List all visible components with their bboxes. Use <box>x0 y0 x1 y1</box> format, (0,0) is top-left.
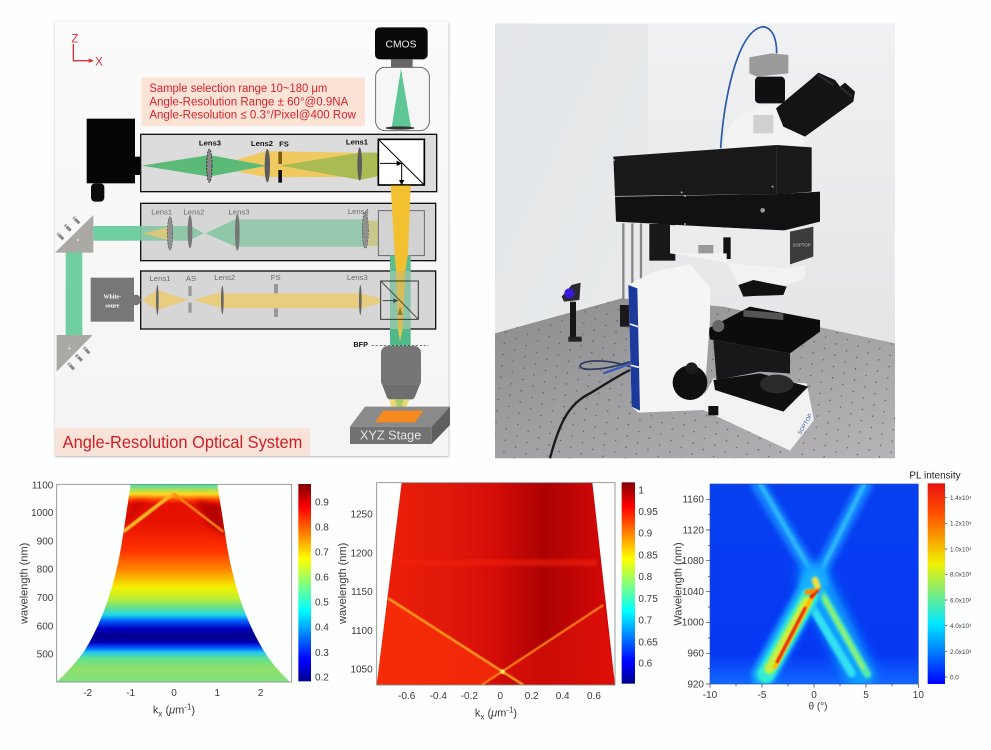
color bar title: PL intensity <box>909 471 961 482</box>
x axis title: θ (°) <box>809 701 827 712</box>
panel: microscope photograph <box>495 23 895 458</box>
x axis title: ) <box>191 704 195 716</box>
specification callout: Angle-Resolution Range ± 60°@0.9NA <box>149 94 348 108</box>
axis ticks <box>706 499 918 688</box>
cables <box>550 361 630 458</box>
y tick labels: 1100 <box>32 480 54 491</box>
y tick labels <box>350 509 373 676</box>
color bar: 1 <box>638 485 644 496</box>
color bar: 0.65 <box>638 637 658 648</box>
module: illumination laser path <box>93 203 436 261</box>
x axis title: μm <box>169 704 184 716</box>
upper black enclosure <box>613 145 812 196</box>
module: detection path: FS <box>279 140 289 149</box>
y tick labels: 600 <box>37 621 54 632</box>
black side box <box>620 305 629 327</box>
color bar: 0.7 <box>638 616 653 627</box>
x tick labels: 10 <box>913 690 924 701</box>
axis indicator z-x: X <box>95 55 103 68</box>
XYZ stage <box>350 407 450 444</box>
color bar: 0.2 <box>315 673 329 684</box>
x tick labels: -2 <box>83 688 93 699</box>
color bar: 0.75 <box>638 594 658 605</box>
color bar <box>622 482 658 684</box>
x tick labels <box>83 688 264 699</box>
BFP label: BFP <box>353 340 368 349</box>
heat map <box>710 484 918 684</box>
objective lens <box>381 346 421 415</box>
color bar: 8.0x10³ <box>950 572 971 579</box>
color bar: 0.85 <box>638 550 658 561</box>
y tick labels: 1150 <box>351 587 373 598</box>
wall background <box>495 23 895 357</box>
color bar: 0.9 <box>315 498 329 509</box>
x axis title: μm <box>491 708 506 720</box>
CMOS camera with tube lens: CMOS <box>385 40 417 51</box>
color bar: 6.0x10³ <box>950 597 971 604</box>
illuminator module <box>670 225 813 268</box>
x axis title: k <box>475 708 480 720</box>
x tick labels: 0 <box>171 688 177 699</box>
eyepieces <box>776 73 855 137</box>
module: white light path: Lens2 <box>214 273 235 282</box>
color bar <box>298 484 329 684</box>
BFP label <box>353 340 428 349</box>
y tick labels: 1250 <box>350 509 373 520</box>
y tick labels: 900 <box>37 536 54 547</box>
axis indicator z-x: Z <box>71 33 79 46</box>
microscope arm <box>698 253 805 285</box>
mirror on post <box>562 283 582 342</box>
module: detection path: Lens1 <box>346 138 369 147</box>
module: detection path: Lens2 <box>251 139 273 148</box>
lower black enclosure <box>615 192 820 231</box>
x axis title: ( <box>162 704 169 716</box>
color bar: 0.6 <box>315 573 329 584</box>
vertical green relay beam <box>66 252 82 335</box>
camera <box>749 53 788 103</box>
heat map <box>377 483 615 685</box>
y axis title: wavelength (nm) <box>337 543 349 625</box>
color bar: 0.8 <box>638 572 653 583</box>
module: white light path: Lens1 <box>150 274 170 283</box>
module: illumination laser path: Lens4 <box>348 207 369 216</box>
x tick labels: 0 <box>498 691 504 702</box>
y tick labels: 1160 <box>683 495 704 506</box>
color bar: 1.4x10⁴ <box>950 495 972 502</box>
chart: kx wavelength reflectance 400-1100 nm <box>18 480 329 718</box>
x tick labels: 1 <box>215 688 221 699</box>
module: white light path: FS <box>271 273 281 282</box>
panel title: Angle-Resolution Optical System <box>63 432 302 452</box>
module: illumination laser path: Lens2 <box>184 208 204 217</box>
x tick labels <box>398 691 601 702</box>
chart: kx wavelength reflectance 1030-1290 nm <box>337 482 658 722</box>
x tick labels: 0.4 <box>556 691 570 702</box>
y tick labels: 920 <box>687 679 704 690</box>
y tick labels: 1040 <box>682 587 704 598</box>
color bar: 1.0x10⁴ <box>950 546 972 553</box>
mirror upper <box>55 215 93 253</box>
mirror lower <box>57 335 93 372</box>
module: illumination laser path: Lens3 <box>229 208 249 217</box>
color bar: 0.5 <box>315 598 329 609</box>
x tick labels: -10 <box>703 690 718 701</box>
color bar: 2.0x10³ <box>950 649 971 656</box>
y axis title: Wavelength (nm) <box>673 542 685 626</box>
vertical beam <box>390 186 411 346</box>
color bar: 0.0 <box>950 674 959 681</box>
x tick labels: -0.4 <box>430 691 447 702</box>
y tick labels: 1000 <box>31 508 54 519</box>
x tick labels: 2 <box>258 688 264 699</box>
color bar: 4.0x10³ <box>950 623 971 630</box>
beam splitter lower <box>381 281 418 319</box>
chart: PL intensity angle map <box>673 471 972 712</box>
specification callout <box>142 77 365 126</box>
spectrometer black body <box>87 119 141 202</box>
axes frame <box>377 483 615 685</box>
y tick labels: 500 <box>37 650 54 661</box>
XYZ stage: XYZ Stage <box>360 428 421 442</box>
axes frame <box>57 484 292 682</box>
illuminator module: SOPTOP <box>793 243 811 248</box>
y tick labels: 700 <box>37 593 54 604</box>
y tick labels: 1050 <box>350 665 373 676</box>
module: white light path: AS <box>186 274 196 283</box>
sample stage <box>708 307 820 380</box>
y tick labels: 1000 <box>682 618 704 629</box>
x axis title: x <box>480 713 484 722</box>
color bar: 0.3 <box>315 648 329 659</box>
x tick labels: -0.2 <box>461 691 478 702</box>
y tick labels: 800 <box>37 565 54 576</box>
color bar: 0.8 <box>315 523 329 534</box>
y tick labels: 960 <box>687 649 704 660</box>
x tick labels: -1 <box>126 688 136 699</box>
module: detection path <box>141 134 437 192</box>
panel: optical system schematic <box>55 22 450 456</box>
support rods <box>623 223 641 300</box>
y tick labels: 1120 <box>683 525 704 536</box>
module: detection path: Lens3 <box>199 138 221 147</box>
panel title <box>55 428 310 456</box>
specification callout: Sample selection range 10~180 μm <box>149 81 327 95</box>
microscope head <box>725 103 777 148</box>
x axis title: x <box>158 709 162 718</box>
y tick labels: 1080 <box>682 556 704 567</box>
white light source <box>91 278 141 322</box>
USB cable <box>721 27 777 148</box>
x tick labels: 0 <box>811 690 817 701</box>
x axis title: -1 <box>184 702 192 711</box>
x tick labels: -5 <box>758 690 767 701</box>
heat sink <box>649 224 675 261</box>
y tick labels <box>31 480 54 661</box>
y tick labels: 1100 <box>351 626 373 637</box>
module: illumination laser path: Lens1 <box>151 208 172 217</box>
optical table <box>495 298 895 458</box>
nosepiece <box>738 280 787 297</box>
axis indicator z-x <box>71 33 103 68</box>
x tick labels: 0.2 <box>525 691 539 702</box>
microscope main body <box>628 263 738 413</box>
color bar: 0.7 <box>315 548 329 559</box>
x tick labels: -0.6 <box>398 691 416 702</box>
x axis title: k <box>153 704 158 716</box>
white light source: soure <box>105 303 120 309</box>
heat map <box>57 484 292 682</box>
focus knob <box>673 362 707 400</box>
x axis title: ) <box>513 708 517 720</box>
CMOS camera with tube lens <box>375 27 429 131</box>
color bar: 0.4 <box>315 623 329 634</box>
x axis title: ( <box>484 708 491 720</box>
x tick labels: 5 <box>863 690 869 701</box>
white light source: White- <box>104 294 121 300</box>
color bar <box>928 483 972 684</box>
color bar: 0.95 <box>638 507 658 518</box>
module: white light path: Lens3 <box>347 273 368 282</box>
microscope base: SOPTOP <box>797 413 814 436</box>
y axis title: wavelength (nm) <box>18 543 30 625</box>
y tick labels: 1200 <box>350 548 373 559</box>
x tick labels: 0.6 <box>587 691 601 702</box>
x tick labels <box>703 690 924 701</box>
microscope base <box>703 373 814 451</box>
specification callout: Angle-Resolution ≤ 0.3°/Pixel@400 Row <box>149 108 356 122</box>
color bar: 0.9 <box>638 529 653 540</box>
axes frame <box>710 484 918 684</box>
x axis title: -1 <box>506 706 514 715</box>
module: white light path <box>141 271 436 329</box>
color bar: 0.6 <box>638 659 653 670</box>
y tick labels <box>682 495 704 690</box>
color bar: 1.2x10⁴ <box>950 521 972 528</box>
